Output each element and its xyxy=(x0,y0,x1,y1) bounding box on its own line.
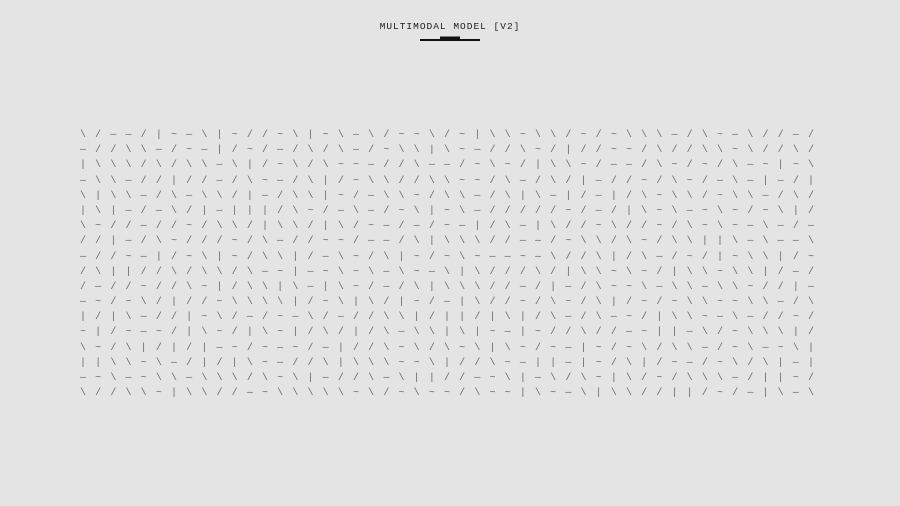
glyph grid: / / | — / \ ~ / / / ~ / \ — / / ~ ~ / — — / \ | \ \ \ / / — — / ~ \ \ / \ ~ / \ \ | | \ — \ — — \ xyxy=(80,236,814,247)
title: MULTIMODAL MODEL [V2] xyxy=(380,21,520,32)
glyph grid: \ / — — / | ~ — \ | ~ / / ~ \ | ~ \ — \ / ~ ~ \ / ~ | \ \ ~ \ \ / ~ / ~ \ \ \ — / \ ~ — \ / / — / xyxy=(80,130,814,141)
glyph grid: | \ | — / — \ / | — | | | / \ ~ / — \ — / ~ \ | ~ \ — / / / / / ~ / — / | \ ~ \ — ~ \ ~ / ~ \ | / xyxy=(80,206,814,217)
glyph grid: ~ | / ~ — ~ / | \ ~ / | \ ~ | / \ / | / \ — \ \ | \ | ~ — | ~ / / \ / / — ~ | | — \ / ~ \ \ \ | / xyxy=(80,327,814,338)
glyph grid: | / | \ — / / | ~ \ / — / ~ — \ / — / / \ \ | / | | / | \ | / \ — / \ — ~ / | \ \ ~ — \ — / / ~ / xyxy=(80,312,814,323)
glyph grid: \ / / \ \ ~ | \ \ / / — ~ \ \ \ \ \ ~ \ / ~ \ ~ ~ / \ ~ ~ | \ ~ — \ | \ \ / / | | / ~ / — | \ — \ xyxy=(80,388,814,399)
glyph grid: \ | \ \ — / \ — \ \ / | — / \ \ | ~ / — \ \ ~ / \ \ — / \ | \ — | / — | / \ ~ \ \ / ~ \ \ — / \ / xyxy=(80,191,814,202)
glyph grid: | \ \ \ / \ / \ \ — \ | / ~ \ / \ ~ ~ — / / \ — — / ~ \ ~ / | \ \ ~ / — — / \ ~ / ~ / \ — ~ | ~ \ xyxy=(80,160,814,171)
glyph grid: \ ~ / / — / / ~ / \ \ / | \ \ / | \ / ~ — / — / ~ — | / \ — | \ / / ~ \ / / ~ / \ ~ \ ~ — \ — / — xyxy=(80,221,814,232)
glyph grid: — \ \ — / / | / / — / \ ~ — / \ | / ~ \ \ / / \ \ ~ ~ / \ — / \ / | — / / ~ / \ ~ / — \ — | — / | xyxy=(80,176,814,187)
glyph grid: / \ | | / / \ / \ \ / \ — ~ | — ~ \ ~ \ — \ ~ — \ | \ / / / \ / | \ \ ~ \ ~ / | \ \ ~ \ \ | / — / xyxy=(80,267,814,278)
title underline marker xyxy=(420,36,480,41)
glyph grid: \ ~ / \ | / | / | — ~ / ~ — ~ / — | / / \ ~ \ / \ ~ \ | \ ~ / ~ — | ~ / ~ \ / \ \ — / ~ \ — ~ \ | xyxy=(80,343,814,354)
glyph grid xyxy=(80,130,814,399)
glyph grid: / — / / ~ / / \ ~ | / \ \ | \ — | \ ~ / — / \ | \ \ \ / / — / | — / \ ~ ~ \ — \ \ — \ \ ~ / / | — xyxy=(80,282,814,293)
glyph grid: — / / \ \ — / ~ — | / ~ / — / \ / \ — / ~ \ \ | \ ~ — / / \ ~ / | / / ~ ~ / \ / / \ \ ~ \ / / \ / xyxy=(80,145,814,156)
glyph grid: — / / ~ — | / ~ \ | ~ / \ \ | / — \ ~ / \ | ~ / ~ \ ~ — — ~ — \ / / \ | / \ — / ~ / | ~ \ \ | / ~ xyxy=(80,252,814,262)
glyph grid: — ~ / ~ \ / | / / ~ \ \ \ \ | / ~ \ | \ / | ~ / — | \ / / ~ / \ ~ / \ | / ~ / ~ \ \ ~ ~ \ \ — / \ xyxy=(80,297,814,308)
glyph grid: — ~ \ — ~ \ \ — \ \ \ / \ ~ \ | — / / \ — \ | | / / — ~ \ | — \ / \ ~ | \ / ~ / \ \ \ — / | | ~ / xyxy=(80,373,814,384)
glyph grid: | | \ \ ~ \ — / | / | \ ~ — / / \ | \ \ \ ~ ~ \ | / / \ ~ — | | — | ~ / \ | / ~ — / ~ \ / \ | — | xyxy=(80,358,814,369)
